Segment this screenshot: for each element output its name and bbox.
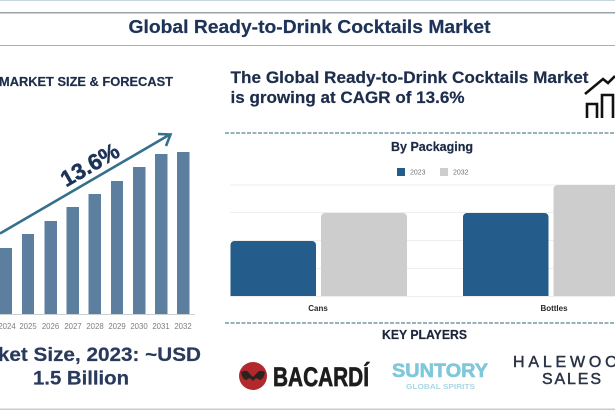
bar group: bottles	[463, 185, 615, 313]
logo: Bacardi: BACARDÍ	[273, 361, 370, 392]
logo: Suntory: SUNTORY	[392, 361, 488, 382]
bar chart: market forecast: 2026	[42, 322, 59, 331]
bar group: cans: Cans	[308, 304, 328, 313]
panel: market size and forecast	[0, 74, 201, 390]
panel: by packaging	[230, 140, 615, 313]
bar chart: market forecast: 2027	[64, 322, 82, 331]
icon: rising buildings	[585, 76, 615, 118]
legend	[397, 168, 469, 176]
bar chart: market forecast: 2029	[108, 322, 126, 331]
panel: key players	[239, 328, 615, 392]
heading: market size and forecast: MARKET SIZE & FORECAST	[0, 74, 173, 89]
bar chart: market forecast: 2030	[130, 322, 148, 331]
logo: Suntory: GLOBAL SPIRITS	[406, 382, 475, 391]
market size callout: 1.5 Billion	[33, 368, 129, 390]
legend: 2023	[410, 170, 426, 176]
bar chart: market forecast: 2025	[19, 322, 37, 331]
title: Global Ready-to-Drink Cocktails Market	[128, 17, 491, 37]
CAGR statement: is growing at CAGR of 13.6%	[230, 88, 464, 107]
logo: Bacardi	[239, 361, 370, 392]
bar group: bottles: Bottles	[540, 304, 568, 313]
bar chart: market forecast: 2032	[174, 322, 192, 331]
legend: 2032	[453, 170, 469, 176]
logo: Halewood Sales	[513, 354, 615, 388]
logo: Suntory	[392, 361, 488, 391]
CAGR statement: The Global Ready-to-Drink Cocktails Market	[230, 68, 589, 87]
chart heading: By Packaging	[391, 140, 473, 154]
logo: Halewood Sales: SALES	[542, 371, 601, 388]
bar chart: market forecast: 2028	[86, 322, 104, 331]
market size callout	[0, 345, 201, 390]
bar chart: market forecast	[0, 152, 195, 331]
heading: key players: KEY PLAYERS	[382, 328, 467, 342]
CAGR statement	[230, 68, 589, 107]
growth rate label: 13.6%	[56, 138, 124, 192]
arrow: growth trend	[0, 134, 170, 234]
bar chart: market forecast: 2031	[152, 322, 170, 331]
bar group: cans	[230, 213, 407, 313]
